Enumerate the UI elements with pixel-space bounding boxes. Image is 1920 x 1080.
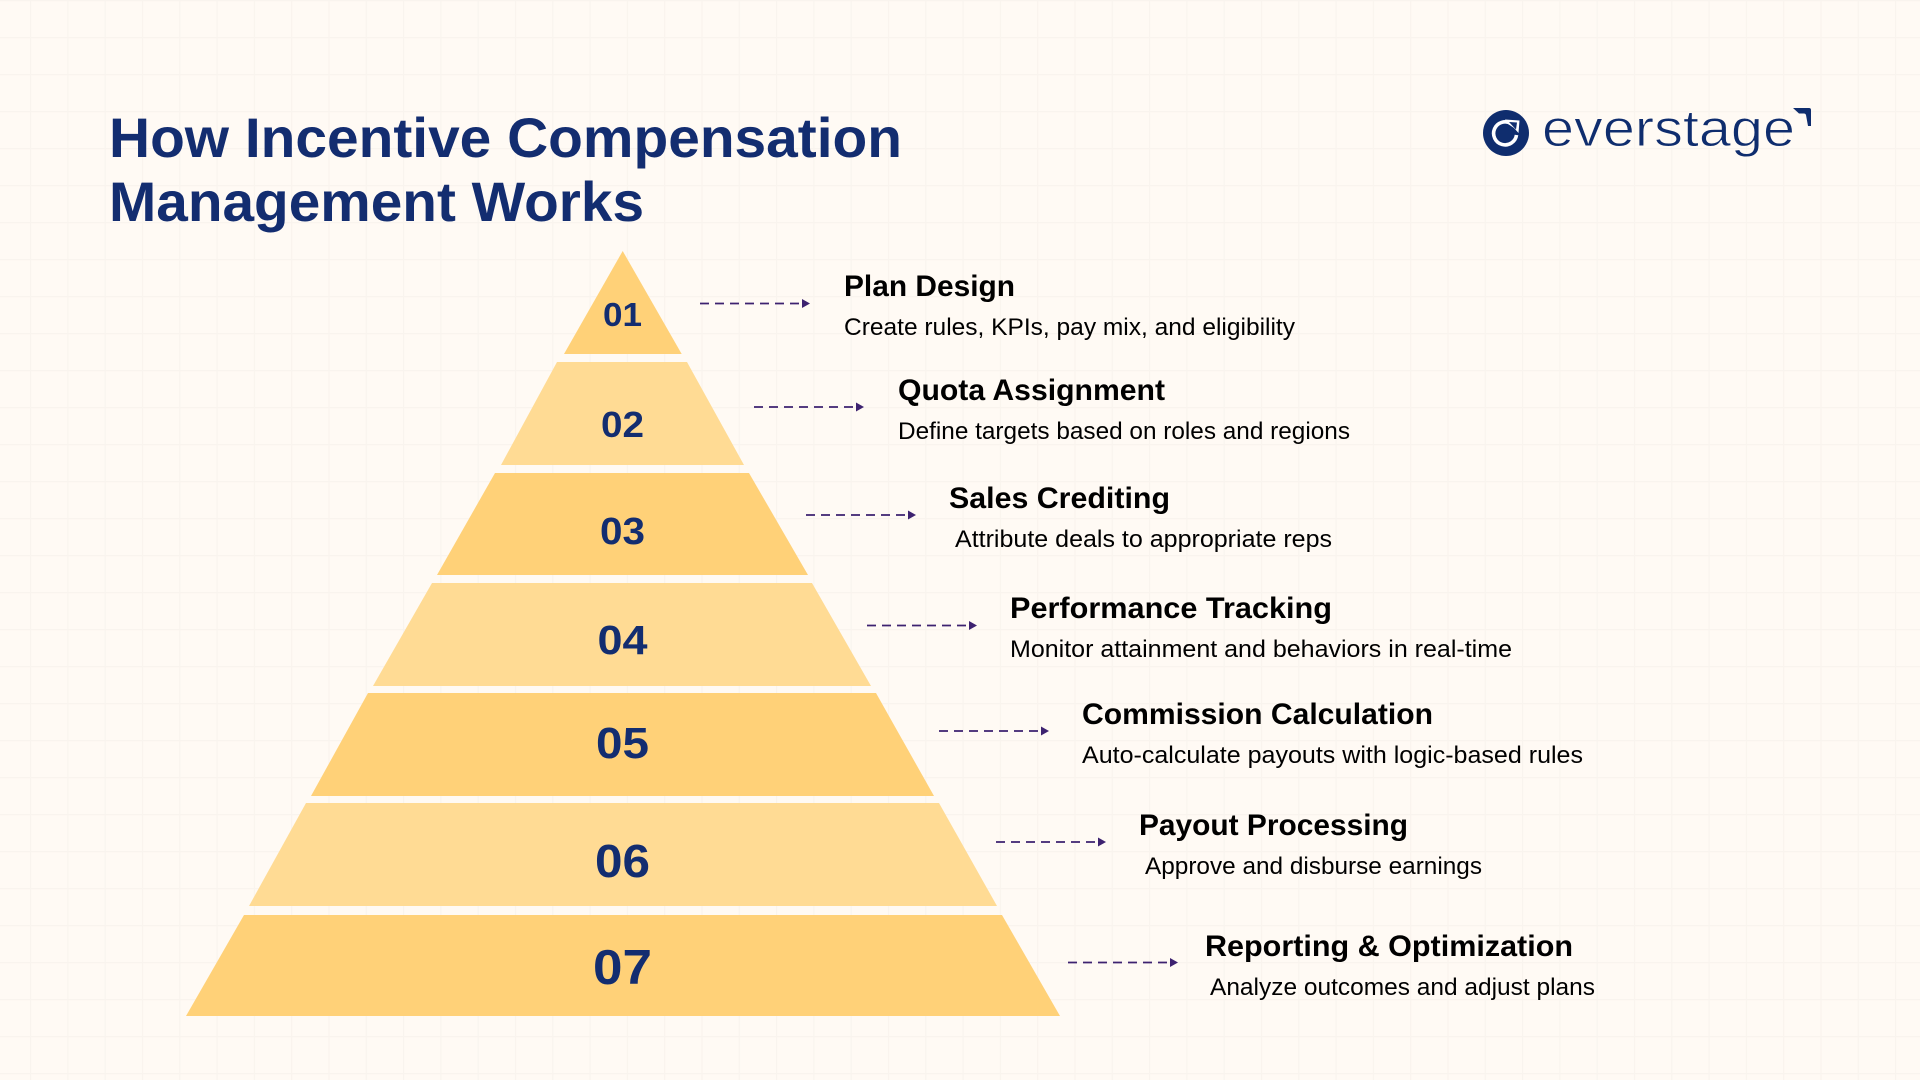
arrow 1	[700, 302, 802, 304]
arrow 7	[1068, 962, 1170, 964]
arrow 2	[754, 406, 856, 408]
tier 04	[373, 583, 871, 686]
title: How Incentive Compensation	[109, 106, 902, 169]
tier 06: 06	[595, 835, 650, 887]
step 6 text	[1139, 809, 1482, 880]
arrow 6	[996, 841, 1098, 843]
step 1 text	[844, 270, 1295, 341]
step 4 text: Monitor attainment and behaviors in real-time	[1010, 636, 1512, 663]
arrow 5	[939, 730, 1041, 732]
step 7 text	[1205, 930, 1595, 1001]
step 5 text: Commission Calculation	[1082, 698, 1433, 731]
step 3 text: Sales Crediting	[949, 482, 1170, 515]
step 7 text: Reporting & Optimization	[1205, 930, 1573, 963]
arrow 3	[806, 514, 908, 516]
step 4 text	[1010, 592, 1512, 663]
step 4 text: Performance Tracking	[1010, 592, 1332, 625]
tier 01: 01	[603, 296, 642, 333]
tier 04: 04	[598, 617, 648, 663]
arrow 4	[867, 624, 969, 626]
tier 01	[564, 251, 682, 354]
step 6 text: Approve and disburse earnings	[1145, 853, 1482, 880]
title: Management Works	[109, 170, 644, 233]
step 6 text: Payout Processing	[1139, 809, 1408, 842]
step 5 text: Auto-calculate payouts with logic-based rules	[1082, 742, 1583, 769]
tier 05	[311, 693, 934, 796]
tier 07: 07	[593, 941, 652, 995]
step 1 text: Create rules, KPIs, pay mix, and eligibility	[844, 314, 1295, 341]
pyramid	[186, 251, 1060, 1016]
step 2 text: Define targets based on roles and regions	[898, 418, 1350, 445]
step 3 text	[949, 482, 1332, 553]
logo: everstage	[1483, 100, 1811, 158]
step 1 text: Plan Design	[844, 270, 1015, 303]
tier 05: 05	[596, 719, 649, 768]
tier 07	[186, 915, 1060, 1016]
tier 02	[501, 362, 744, 465]
tier 03: 03	[600, 511, 645, 553]
step 2 text	[898, 374, 1350, 445]
step 5 text	[1082, 698, 1583, 769]
logo: everstage: everstage	[1542, 100, 1795, 158]
title	[109, 106, 902, 233]
step 2 text: Quota Assignment	[898, 374, 1165, 407]
tier 02: 02	[601, 404, 644, 445]
step 7 text: Analyze outcomes and adjust plans	[1210, 974, 1595, 1001]
tier 03	[437, 473, 808, 575]
tier 06	[249, 803, 997, 906]
step 3 text: Attribute deals to appropriate reps	[955, 526, 1332, 553]
